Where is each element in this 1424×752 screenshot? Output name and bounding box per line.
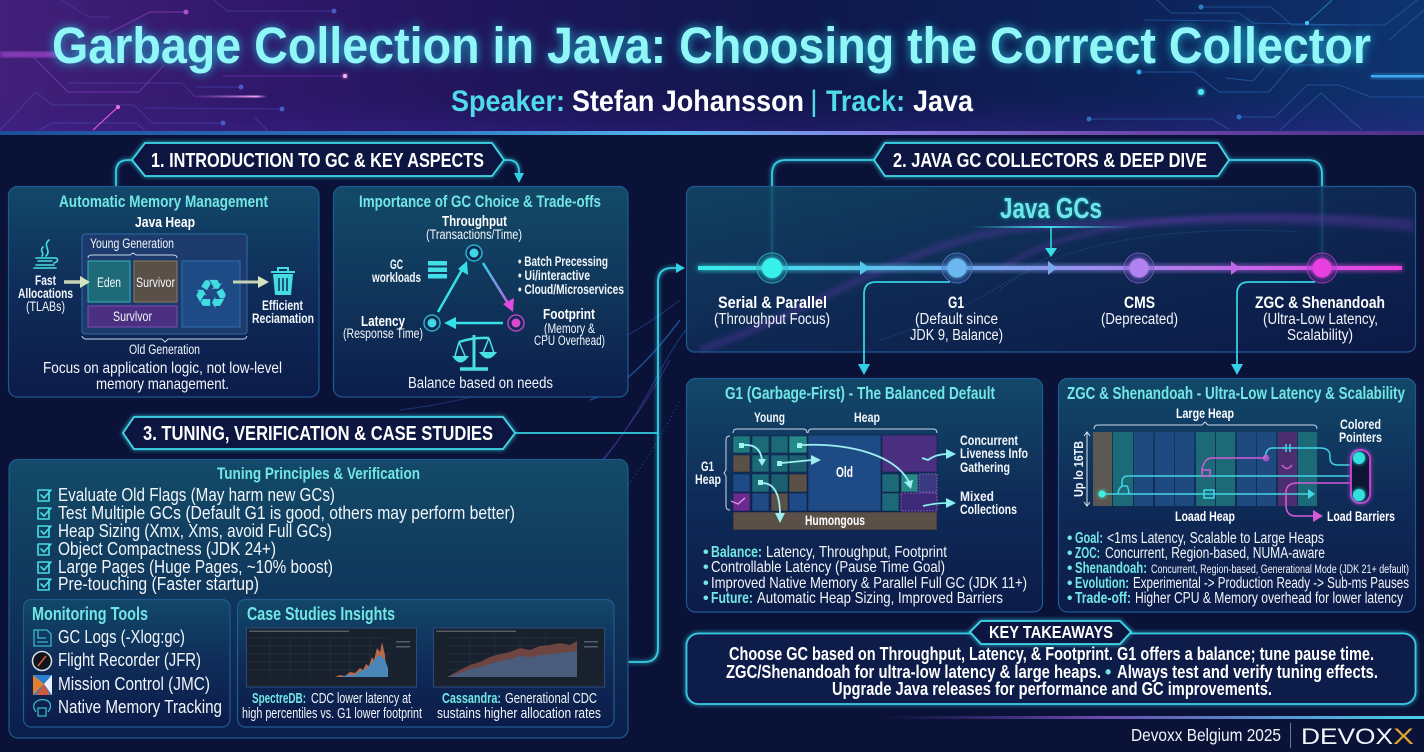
takeaways text: Upgrade Java releases for performance and GC improvements. — [832, 679, 1272, 699]
caption: cassandra: Cassandra: — [442, 690, 501, 707]
arrow: g1 node to g1 panel — [858, 282, 950, 375]
label: load barriers: Load Barriers — [1327, 508, 1395, 524]
label: up to 16tb — [1071, 432, 1090, 506]
monitoring list — [58, 626, 222, 717]
caption: cassandra: Generational CDC — [505, 690, 597, 707]
panel note: memory management. — [96, 376, 229, 393]
caption: cassandra: sustains higher allocation rates — [437, 705, 601, 722]
monitoring list: Native Memory Tracking — [58, 696, 222, 717]
workload bullet list: • Ui/interactive — [518, 268, 590, 283]
footer: devoxx logo — [1290, 723, 1414, 749]
arrow: zgc node to zgc panel — [1231, 282, 1315, 375]
panel heading: Importance of GC Choice & Trade-offs — [359, 192, 601, 211]
g1 bullet list: Controllable Latency (Pause Time Goal) — [711, 559, 945, 576]
label: gc workloads — [371, 257, 421, 285]
workload bullet list: • Batch Precessing — [518, 254, 608, 269]
label: cms — [1101, 294, 1178, 328]
label: g1: JDK 9, Balance) — [910, 327, 1003, 344]
footer: event name: Devoxx Belgium 2025 — [1131, 725, 1281, 745]
label: footprint — [534, 306, 605, 348]
g1 bullet list: Balance: — [711, 544, 762, 561]
panel note: Focus on application logic, not low-level — [43, 360, 282, 377]
label: mixed collections: Collections — [960, 501, 1017, 517]
label: old generation — [82, 336, 247, 357]
label: concurrent liveness: Concurrent — [960, 432, 1018, 448]
label: large heap: Large Heap — [1176, 405, 1234, 421]
panel heading: Tuning Principles & Verification — [217, 464, 420, 483]
g1 bullet list: Latency, Throughput, Footprint — [766, 544, 947, 561]
panel: key takeaways — [686, 621, 1416, 704]
section heading 2 with connectors: 2. JAVA GC COLLECTORS & DEEP DIVE — [893, 149, 1207, 172]
zgc bullet list: Goal: — [1075, 530, 1103, 547]
trade-off triangle — [424, 245, 524, 331]
label: concurrent liveness — [960, 432, 1028, 475]
footer line — [880, 716, 1424, 719]
panel heading: Java GCs — [1000, 193, 1102, 225]
tuning checklist: Test Multiple GCs (Default G1 is good, others may perform better) — [58, 503, 515, 523]
chart: spectredb latency — [246, 628, 416, 687]
label: large heap — [1094, 405, 1317, 429]
bracket marks — [724, 429, 937, 510]
label: efficient reclamation: Reciamation — [252, 311, 314, 326]
icon: java cup — [34, 240, 58, 268]
section heading 1 with connectors — [116, 143, 524, 186]
icon: flight recorder — [32, 652, 52, 670]
label: zgc and shenandoah: (Ultra-Low Latency, — [1263, 311, 1378, 328]
icon: native memory — [34, 700, 50, 716]
g1 bullet list: • — [703, 559, 709, 576]
icon: server stack — [428, 261, 447, 278]
caption: spectredb: SpectreDB: — [252, 690, 306, 707]
section heading 3 — [123, 417, 515, 449]
zgc bullet list: • — [1067, 530, 1072, 547]
tuning checklist: Evaluate Old Flags (May harm new GCs) — [58, 485, 335, 505]
g1 bullet list: Automatic Heap Sizing, Improved Barriers — [757, 590, 1003, 607]
takeaways text: ZGC/Shenandoah for ultra-low latency & large heaps. — [726, 662, 1101, 682]
g1 bullet list: • — [703, 544, 709, 561]
heap region labels: Heap — [854, 409, 880, 425]
label: cms: (Deprecated) — [1101, 311, 1178, 328]
footer: devoxx logo: DEVOX — [1301, 724, 1393, 749]
caption: cassandra — [437, 690, 601, 722]
panel: monitoring tools — [24, 600, 230, 727]
label: footprint: Footprint — [543, 306, 595, 323]
label: latency: Latency — [361, 313, 405, 330]
panel heading: Case Studies Insights — [247, 603, 395, 624]
label: efficient reclamation — [252, 298, 314, 326]
panel: importance of gc choice — [334, 186, 628, 397]
arrow: heading to timeline — [969, 226, 1131, 257]
monitoring list: Mission Control (JMC) — [58, 673, 210, 694]
icon: gc logs — [34, 630, 51, 646]
gc timeline — [698, 252, 1402, 284]
label: latency: (Response Time) — [343, 326, 423, 341]
panel: java gcs timeline — [686, 186, 1416, 352]
zgc bullet list: Shenandoah: — [1075, 560, 1147, 577]
arrow: allocation into eden — [64, 276, 90, 288]
java heap diagram: Young Generation — [90, 236, 174, 251]
takeaways text: • — [1105, 662, 1111, 682]
wave decoration — [700, 216, 1414, 350]
key takeaways badge: KEY TAKEAWAYS — [989, 622, 1113, 642]
panel note — [43, 360, 282, 393]
footer: devoxx logo: X — [1393, 724, 1414, 749]
zgc bullet list: • — [1067, 575, 1072, 592]
section heading 3: 3. TUNING, VERIFICATION & CASE STUDIES — [143, 422, 493, 445]
panel: zgc and shenandoah — [1058, 378, 1416, 612]
arrow: reclamation — [233, 276, 269, 288]
icon: recycle: ♻ — [193, 272, 229, 318]
g1 bullet list: Improved Native Memory & Parallel Full GC (JDK 11+) — [711, 575, 1027, 592]
arrow: concurrent liveness — [922, 449, 956, 460]
zgc bullet list: Evolution: — [1075, 575, 1129, 592]
circuit lines right — [1086, 0, 1424, 130]
g1 region grid — [733, 435, 937, 530]
chart: cassandra allocation — [434, 628, 604, 687]
label: g1: (Default since — [915, 311, 998, 328]
label: concurrent liveness: Gathering — [960, 459, 1010, 475]
panel heading: Automatic Memory Management — [59, 192, 268, 211]
subtitle: speaker and track: Stefan Johansson — [572, 85, 804, 118]
icon: trash bin — [271, 268, 295, 295]
g1 bullet list — [703, 544, 1027, 607]
label: fast allocations: Allocations — [18, 286, 73, 301]
icon: mission control — [33, 675, 52, 695]
heap region labels: Young — [754, 409, 785, 425]
g1 bullet list: Future: — [711, 590, 753, 607]
g1 region grid: Humongous — [805, 512, 865, 528]
java heap diagram: Survlvor — [113, 308, 152, 324]
background wave decoration — [400, 290, 720, 600]
tuning checklist: Large Pages (Huge Pages, ~10% boost) — [58, 557, 333, 577]
subtitle: speaker and track: Speaker: — [451, 85, 565, 118]
node: zgc and shenandoah — [1307, 253, 1337, 283]
zgc bullet list: <1ms Latency, Scalable to Large Heaps — [1107, 530, 1324, 547]
label: concurrent liveness: Liveness Info — [960, 445, 1028, 461]
label: zgc and shenandoah: ZGC & Shenandoah — [1255, 294, 1385, 312]
label: footprint: CPU Overhead) — [534, 333, 605, 348]
label: g1 — [910, 294, 1003, 344]
tuning checklist: Heap Sizing (Xmx, Xms, avoid Full GCs) — [58, 521, 332, 541]
tuning checklist: Pre-touching (Faster startup) — [58, 574, 259, 594]
workload bullet list — [518, 254, 624, 297]
label: cms: CMS — [1124, 294, 1155, 312]
label: mixed collections — [960, 488, 1017, 517]
node: serial and parallel — [756, 252, 788, 284]
label: throughput: Throughput — [442, 213, 507, 230]
label: latency — [343, 313, 423, 341]
label: zgc and shenandoah: Scalability) — [1287, 327, 1353, 344]
label: mixed collections: Mixed — [960, 488, 994, 504]
label: serial and parallel: (Throughput Focus) — [714, 311, 830, 328]
label: g1: G1 — [948, 294, 964, 312]
label: fast allocations: Fast — [35, 273, 56, 288]
zgc bullet list: Trade-off: — [1075, 590, 1131, 607]
label: fast allocations: (TLABs) — [26, 299, 65, 314]
label: gc workloads: GC — [390, 257, 403, 272]
workload bullet list: • Cloud/Microservices — [518, 282, 624, 297]
header banner — [0, 0, 1424, 135]
g1 bullet list: • — [703, 590, 709, 607]
section heading 2 with connectors — [772, 143, 1322, 258]
section heading 1 with connectors: 1. INTRODUCTION TO GC & KEY ASPECTS — [151, 149, 484, 172]
g1 bullet list: • — [703, 575, 709, 592]
check icons — [38, 490, 51, 590]
zgc bullet list: • — [1067, 560, 1072, 577]
section 3 connector to timeline — [515, 263, 685, 662]
label: serial and parallel: Serial & Parallel — [718, 294, 827, 312]
zgc bullet list — [1067, 530, 1409, 607]
icon: balance scale — [454, 335, 495, 369]
label: fast allocations — [18, 273, 73, 314]
tuning checklist — [38, 485, 515, 594]
caption: spectredb: CDC lower latency at — [311, 690, 412, 707]
label: efficient reclamation: Efficient — [262, 298, 303, 313]
zgc bullet list: • — [1067, 590, 1072, 607]
label: throughput — [426, 213, 522, 242]
panel: case studies — [238, 600, 614, 727]
takeaways text — [726, 644, 1378, 699]
label: zgc and shenandoah — [1255, 294, 1385, 344]
object movement arrows — [731, 443, 913, 523]
node: cms — [1124, 253, 1154, 283]
zgc bullet list: ZOC: — [1075, 545, 1100, 562]
zgc bullet list: Concurrent, Region-based, NUMA-aware — [1105, 545, 1325, 562]
icon: colored pointers — [1351, 450, 1370, 503]
caption: spectredb — [242, 690, 423, 722]
panel: automatic memory management — [8, 186, 319, 397]
heap region labels: Heap — [695, 471, 721, 487]
label: gc workloads: workloads — [371, 270, 421, 285]
arrow: mixed collections — [923, 498, 956, 508]
java heap diagram: Eden — [97, 274, 121, 290]
tuning checklist: Object Compactness (JDK 24+) — [58, 539, 276, 559]
panel heading: G1 (Garbage-First) - The Balanced Default — [725, 383, 995, 403]
label: footprint: (Memory & — [544, 321, 595, 336]
monitoring list: Flight Recorder (JFR) — [58, 649, 201, 670]
g1 region grid: Old — [836, 464, 853, 481]
label: serial and parallel — [714, 294, 830, 328]
subtitle: speaker and track: | — [810, 85, 818, 118]
panel heading: Monitoring Tools — [32, 603, 148, 624]
circuit lines left — [0, 0, 347, 131]
heap region labels: G1 — [701, 458, 714, 474]
label: colored pointers: Colored — [1340, 416, 1381, 432]
label: java heap: Java Heap — [135, 214, 195, 231]
label: old generation: Old Generation — [129, 342, 200, 357]
subtitle: speaker and track — [451, 85, 973, 118]
label: up to 16tb: Up lo 16TB — [1071, 441, 1086, 497]
label: load heap: Loaad Heap — [1175, 508, 1235, 524]
subtitle: speaker and track: Java — [913, 85, 973, 118]
label: throughput: (Transactions/Time) — [426, 227, 522, 242]
heap region labels — [695, 409, 880, 487]
panel: tuning principles — [9, 460, 628, 738]
panel note: Balance based on needs — [408, 375, 553, 392]
caption: spectredb: high percentiles vs. G1 lower footprint — [242, 705, 423, 722]
label: colored pointers — [1339, 416, 1382, 445]
monitoring list: GC Logs (-Xlog:gc) — [58, 626, 185, 647]
java heap diagram: Survivor — [136, 274, 175, 290]
java heap diagram — [82, 234, 247, 334]
zgc bullet list: • — [1067, 545, 1072, 562]
panel: g1 garbage first — [686, 378, 1042, 612]
node: g1 — [942, 253, 972, 283]
pointer and barrier paths — [1098, 444, 1352, 522]
subtitle: speaker and track: Track: — [826, 85, 905, 118]
heap region columns — [1093, 432, 1317, 506]
label: colored pointers: Pointers — [1339, 429, 1382, 445]
